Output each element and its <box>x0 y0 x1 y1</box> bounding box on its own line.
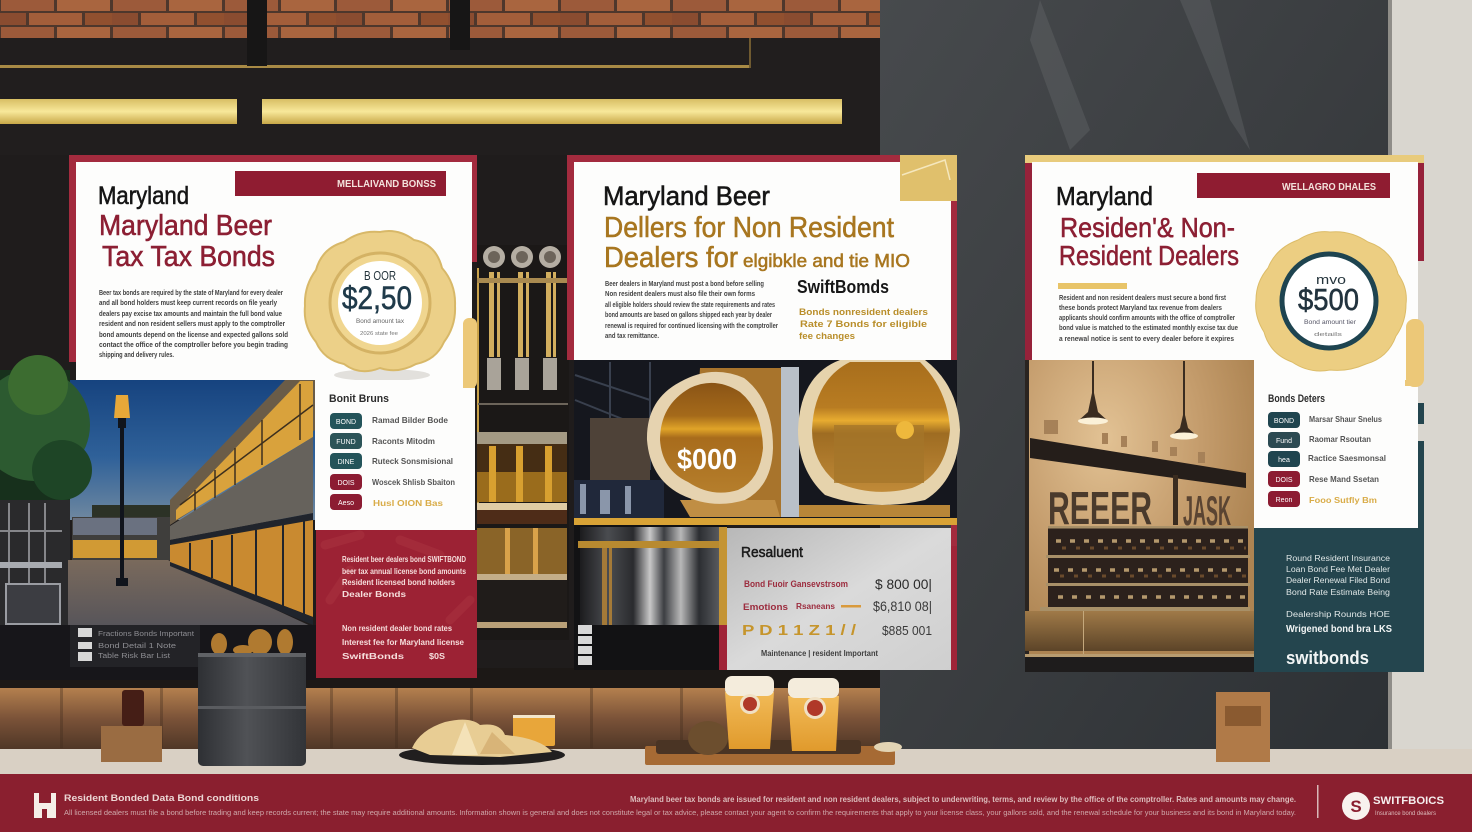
photo caption: Bond Detail 1 Note <box>98 643 176 650</box>
poster 1 list row 4 <box>330 474 455 490</box>
poster 1 list row 4: DOIS <box>337 480 355 487</box>
poster 3 brand: switbonds <box>1286 648 1369 668</box>
poster 1 body text: dealers pay excise tax amounts and maintain the full bond value <box>99 311 282 318</box>
footer divider <box>1317 785 1318 818</box>
poster 2 body text: bond amounts are based on gallons shipped each year by dealer <box>605 312 772 319</box>
plate of pastries <box>399 715 565 765</box>
poster 3 wax seal: mvo <box>1316 272 1346 287</box>
poster 3 body text: bond value is matched to the estimated monthly excise tax due <box>1059 325 1238 332</box>
footer band <box>0 774 1472 832</box>
poster 3 list row 1 <box>1268 412 1382 428</box>
poster 2 body text: Beer dealers in Maryland must post a bond before selling <box>605 281 764 288</box>
poster 1 wax seal: 2026 state fee <box>360 331 398 337</box>
poster 2 brand: SwiftBomds <box>797 277 889 297</box>
poster 1 list panel: Bonit Bruns <box>329 393 389 405</box>
poster 2 body text: renewal is required for continued licensing with the comptroller <box>605 323 778 330</box>
poster 3 heading <box>1056 181 1239 271</box>
poster 1 list row 1 <box>330 413 448 429</box>
footer legal line 1: Maryland beer tax bonds are issued for resident and non resident dealers, subject to underwriting, terms, and review by the office of the comptroller. Rates and amounts may change. <box>630 795 1296 804</box>
poster 1: Maryland Beer Tax Bonds <box>0 155 477 680</box>
poster 1 heading <box>98 182 275 273</box>
bottle shelves <box>1040 526 1250 611</box>
poster 2 body text: and tax remittance. <box>605 333 659 340</box>
ceiling light bar: right <box>262 99 842 124</box>
small bottle and crate <box>101 690 162 762</box>
poster 1 heading: Tax Tax Bonds <box>102 241 275 273</box>
barrel price: $000 <box>677 444 737 476</box>
poster 3 list row 2 <box>1268 432 1371 448</box>
poster 3 heading: Maryland <box>1056 181 1153 211</box>
poster 2 red frame <box>567 155 957 365</box>
poster 2 body text <box>605 281 778 340</box>
poster 1 body text <box>99 290 288 359</box>
photo caption: Table Risk Bar List <box>98 653 170 660</box>
poster 3 teal panel: Dealer Renewal Filed Bond <box>1286 576 1390 585</box>
poster 3 body text <box>1059 295 1238 343</box>
poster 1 body text: resident and non resident sellers must apply to the comptroller <box>99 321 285 328</box>
poster 3 teal panel: Round Resident Insurance <box>1286 554 1391 563</box>
footer title: Resident Bonded Data Bond conditions <box>64 793 259 804</box>
poster 3 teal panel: Loan Bond Fee Met Dealer <box>1286 565 1390 574</box>
countertop <box>0 749 1472 774</box>
poster 3 heading: Residen'& Non- <box>1060 212 1235 243</box>
rates footnote: Maintenance | resident Important <box>761 649 878 658</box>
poster 1 body text: bond amounts depend on the license and expected gallons sold <box>99 332 288 339</box>
photo caption: Fractions Bonds Important <box>98 631 194 638</box>
poster 3 wax seal: details <box>1314 332 1343 338</box>
poster 3 list row 4: Rese Mand Ssetan <box>1309 474 1379 484</box>
poster 2 heading: elgibkle and tie MIO <box>743 251 910 271</box>
poster 3 gold tab <box>1406 319 1424 387</box>
rate row 1: $ 800 00| <box>875 576 932 592</box>
poster 3 photo: beer hall: JASK <box>1183 487 1231 534</box>
poster 1 list row 4: Woscek Shlisb Sbaiton <box>372 477 455 487</box>
poster 1 list row 5: Aeso <box>338 500 354 507</box>
poster 2 steel tank <box>574 518 957 670</box>
poster 1 body text: contact the office of the comptroller before you begin trading <box>99 342 288 349</box>
poster 3 body text: these bonds protect Maryland tax revenue from dealers <box>1059 305 1222 312</box>
poster 1 white header card <box>76 162 472 380</box>
poster 3 list row 3: hea <box>1278 457 1290 464</box>
poster 1 red panel: beer tax annual license bond amounts <box>342 567 466 576</box>
poster 1 wax seal: $2,50 <box>342 280 412 316</box>
poster 3 wax seal: Bond amount tier <box>1304 320 1356 326</box>
poster 3 list row 1: BOND <box>1274 418 1294 425</box>
photo caption <box>78 628 194 661</box>
poster 3 teal panel: Dealership Rounds HOE <box>1286 610 1390 619</box>
poster 2 body text: all eligible holders should review the state requirements and rates <box>605 302 775 309</box>
poster 1 red panel: Resident beer dealers bond SWIFTBOND <box>342 555 466 564</box>
rate row 3 <box>742 622 932 639</box>
poster 2 gold corner <box>900 155 957 201</box>
poster 1 list row 5 <box>330 494 443 510</box>
poster 1 wax seal: B OOR <box>364 268 396 283</box>
wall lettering: REEER <box>1048 482 1152 534</box>
poster 3 list row 4 <box>1268 471 1379 487</box>
poster 2 gold notes: fee changes <box>799 331 855 342</box>
poster 3 list row 5: Fooo Sutfly Bm <box>1309 495 1377 505</box>
poster 1 body text: shipping and delivery rules. <box>99 352 174 359</box>
poster 1 heading: Maryland <box>98 182 189 210</box>
tank caption <box>578 625 592 665</box>
footer brand: Insurance bond dealers <box>1375 811 1436 817</box>
poster 1 list row 3 <box>330 453 453 469</box>
rate row 2 <box>743 598 932 614</box>
poster 2 gold notes <box>799 307 928 342</box>
poster 3: Resident and Non-Resident Dealers <box>1025 155 1424 672</box>
lamp 2 <box>1171 361 1197 436</box>
rate row 2: Emotions <box>743 602 788 612</box>
poster 1 list row 1: BOND <box>336 419 356 426</box>
poster 3 teal panel: Wrigened bond bra LKS <box>1286 624 1392 635</box>
beer glass right <box>788 678 839 751</box>
poster 2 body text: Non resident dealers must also file their own forms <box>605 291 755 298</box>
lamp 1 <box>1078 361 1108 421</box>
poster 3 list row 2: Raomar Rsoutan <box>1309 434 1371 444</box>
poster 1 red panel: $0S <box>429 652 446 661</box>
poster 2 white header card <box>574 162 951 360</box>
poster 3 list row 2: Fund <box>1276 438 1292 445</box>
poster 3 photo: beer hall <box>1025 360 1254 672</box>
poster 3 body text: a renewal notice is sent to every dealer before it expires <box>1059 336 1234 343</box>
poster 1 body text: Beer tax bonds are required by the state of Maryland for every dealer <box>99 290 283 297</box>
poster 3 gold rule <box>1058 283 1127 289</box>
poster 3 ribbon: WELLAGRO DHALES <box>1282 182 1376 193</box>
poster 3 list row 5: Reon <box>1276 497 1292 504</box>
poster 2 heading: Dealers for <box>604 242 738 274</box>
poster 3 list row 3: Ractice Saesmonsal <box>1308 453 1386 463</box>
poster 3 gold and red frame <box>1025 155 1424 360</box>
poster 3 white header card <box>1032 162 1418 360</box>
poster 1 list row 3: Ruteck Sonsmisional <box>372 456 453 466</box>
footer brand: SWITFBOICS <box>1373 795 1444 807</box>
footer legal line 2: All licensed dealers must file a bond before trading and keep records current; the state may require additional amounts. Information shown is general and does not constitute legal or tax advice, please contact your agent to confirm the requirements that apply to your license class, your gallons sold, and the renewal schedule for your business and its bond in Maryland today. <box>64 810 1296 817</box>
poster 1 list panel <box>315 380 475 530</box>
poster 3 wax seal: $500 <box>1298 282 1359 317</box>
beer glass left <box>725 676 774 749</box>
rate row 3: $885 001 <box>882 623 932 638</box>
rate row 1 <box>744 576 932 592</box>
poster 1 list row 5: Husl OION Bas <box>373 498 443 508</box>
poster 1 list row 1: Ramad Bilder Bode <box>372 415 448 425</box>
poster 1 red frame <box>69 155 477 380</box>
poster 3 list panel: Bonds Deters <box>1268 393 1325 405</box>
poster 2: Dealers for Non Resident <box>567 155 960 670</box>
wooden tray <box>645 721 902 765</box>
poster 1 red panel <box>316 530 477 678</box>
poster 3 list row 5 <box>1268 491 1377 507</box>
metal barrel with pastries <box>198 629 306 766</box>
poster 3 list panel <box>1254 360 1424 528</box>
poster 2 photo: barrels <box>574 360 960 525</box>
rate row 2: $6,810 08| <box>873 598 932 614</box>
lamp post <box>114 395 130 586</box>
poster 3 teal panel <box>1254 528 1424 672</box>
poster 3 list row 4: DOIS <box>1275 477 1293 484</box>
poster 3 body text: Resident and non resident dealers must secure a bond first <box>1059 295 1227 302</box>
kraft box <box>1216 692 1270 762</box>
poster 1 ribbon <box>235 171 446 196</box>
poster 2 rates panel: Resaluent <box>741 544 804 561</box>
poster 1 photo: brewery building at dusk <box>0 355 316 680</box>
rate row 3: P D 1 1 Z 1 / / <box>742 622 857 639</box>
wood wainscot behind counter <box>0 668 880 750</box>
poster 3 list row 1: Marsar Shaur Snelus <box>1309 414 1382 424</box>
beer taps and shelves between posters <box>477 245 569 640</box>
poster 2 heading: Dellers for Non Resident <box>604 212 894 244</box>
poster 1 body text: and all bond holders must keep current records on file yearly <box>99 300 277 307</box>
footer brand: S <box>1350 797 1362 816</box>
poster 1 red panel: Interest fee for Maryland license <box>342 638 465 647</box>
poster 3 ribbon <box>1197 173 1390 198</box>
poster 1 list row 2: FUND <box>336 439 356 446</box>
poster 2 gold notes: Rate 7 Bonds for eligible <box>800 319 927 330</box>
poster 1 list row 2 <box>330 433 435 449</box>
poster 1 wax seal: Bond amount tax <box>356 319 404 325</box>
poster 1 red panel: Non resident dealer bond rates <box>342 624 453 633</box>
poster 2 rates panel <box>727 528 957 670</box>
footer logo <box>34 793 56 818</box>
poster 1 heading: Maryland Beer <box>99 210 272 242</box>
poster 3 heading: Resident Dealers <box>1059 240 1239 271</box>
poster 3 teal panel: Bond Rate Estimate Being <box>1286 588 1390 597</box>
poster 1 red panel: Resident licensed bond holders <box>342 578 456 587</box>
rate row 1: Bond Fuoir Gansevstrsom <box>744 579 848 589</box>
poster 1 list row 2: Raconts Mitodm <box>372 436 435 446</box>
poster 3 body text: applicants should confirm amounts with the office of comptroller <box>1059 315 1235 322</box>
poster 1 ribbon: MELLAIVAND BONSS <box>337 179 436 190</box>
footer brand <box>1342 792 1444 820</box>
poster 3 list row 3 <box>1268 451 1386 467</box>
poster 2 heading <box>603 181 910 274</box>
poster 1 red panel: Dealer Bonds <box>342 590 407 599</box>
ceiling light bar: left <box>0 99 237 124</box>
poster 1 gold tab <box>463 318 477 388</box>
shelf beam <box>1030 438 1246 488</box>
poster 2 heading: Maryland Beer <box>603 181 770 211</box>
poster 1 list row 3: DINE <box>338 459 355 466</box>
rate row 2: Rsaneans <box>796 602 836 611</box>
poster 3 wax seal <box>1256 232 1406 371</box>
poster 1 red panel: SwiftBonds <box>342 652 405 661</box>
poster 2 gold notes: Bonds nonresident dealers <box>799 307 928 318</box>
poster 1 wax seal <box>305 231 455 381</box>
